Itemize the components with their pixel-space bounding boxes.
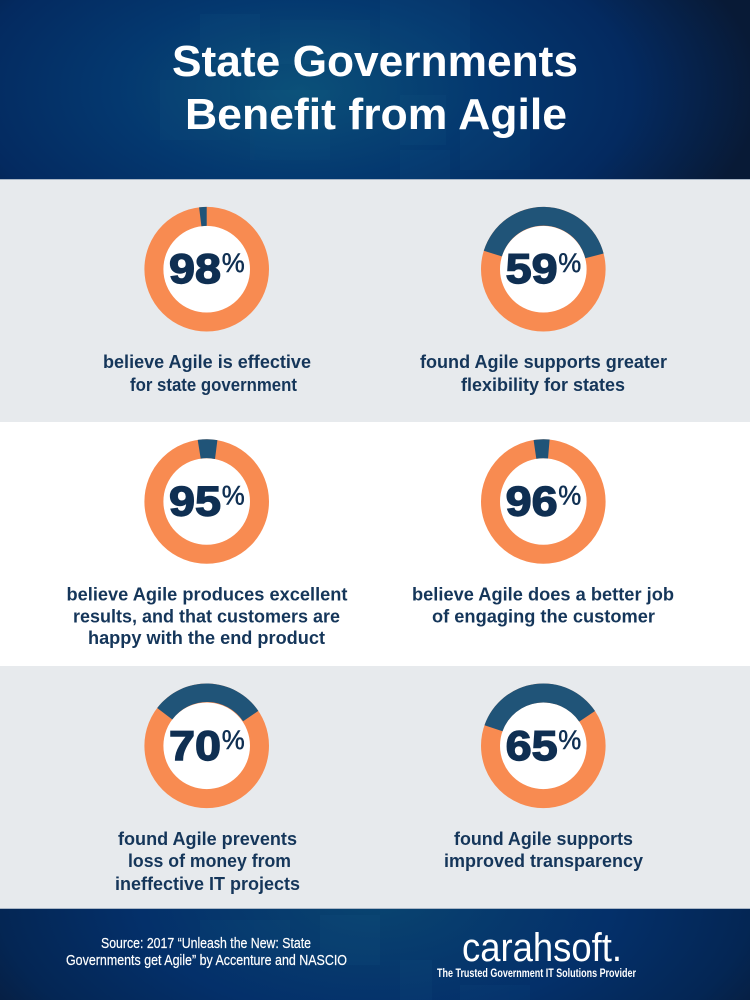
caption: ineffective IT projects [115,873,300,894]
donut chart: 65 percent [484,683,596,799]
caption [103,351,311,395]
caption: found Agile prevents [118,828,297,849]
caption: found Agile supports greater [420,351,667,372]
stat: 98 percent [103,207,311,395]
panel: row 2 background [0,422,750,666]
donut chart: 59 percent: 59 [506,245,558,292]
title [172,37,578,139]
donut chart: 59 percent: % [558,248,581,278]
caption [420,351,667,395]
caption [66,584,348,648]
donut chart: 96 percent [490,439,596,554]
caption: of engaging the customer [432,606,655,626]
donut chart: 98 percent [154,207,260,322]
stat: 95 percent [66,439,348,648]
donut chart: 65 percent: 65 [506,722,558,769]
caption: believe Agile produces excellent [66,584,348,604]
stat: 59 percent [420,207,667,395]
panel: header banner [0,0,750,180]
stat: 65 percent [444,683,644,871]
logo: carahsoft: The Trusted Government IT Solutions Provider [437,968,636,980]
logo: carahsoft: carahsoft. [462,926,622,970]
panel: row 3 background [0,666,750,909]
donut chart: 95 percent: % [222,480,245,510]
caption: believe Agile is effective [103,351,311,372]
source citation: Source: 2017 “Unleash the New: State [101,936,311,952]
caption: loss of money from [128,850,291,871]
caption: happy with the end product [88,627,325,648]
stat: 70 percent [115,684,300,894]
donut chart: 95 percent: 95 [169,478,221,524]
caption [444,828,644,871]
donut chart: 65 percent: % [558,725,581,755]
donut chart: 96 percent: 96 [506,478,558,524]
caption: believe Agile does a better job [412,584,674,604]
donut chart: 96 percent: % [558,480,581,510]
donut chart: 98 percent: 98 [169,245,221,292]
caption: improved transparency [444,850,644,871]
panel: footer banner [0,908,750,1000]
caption [412,584,674,626]
caption: flexibility for states [461,374,625,395]
caption: results, and that customers are [73,606,340,626]
source citation: Governments get Agile” by Accenture and NASCIO [66,953,347,969]
caption: for state government [130,374,297,395]
donut chart: 98 percent: % [222,248,245,278]
caption: found Agile supports [454,828,633,849]
stat: 96 percent [412,439,674,626]
donut chart: 70 percent: 70 [169,722,221,769]
donut chart: 59 percent [484,207,604,322]
donut chart: 70 percent [154,684,260,799]
title: State Governments [172,37,578,86]
donut chart: 70 percent: % [222,725,245,755]
caption [115,828,300,894]
donut chart: 95 percent [154,439,260,554]
source citation [66,936,347,969]
title: Benefit from Agile [185,90,567,139]
panel: row 1 background [0,180,750,422]
